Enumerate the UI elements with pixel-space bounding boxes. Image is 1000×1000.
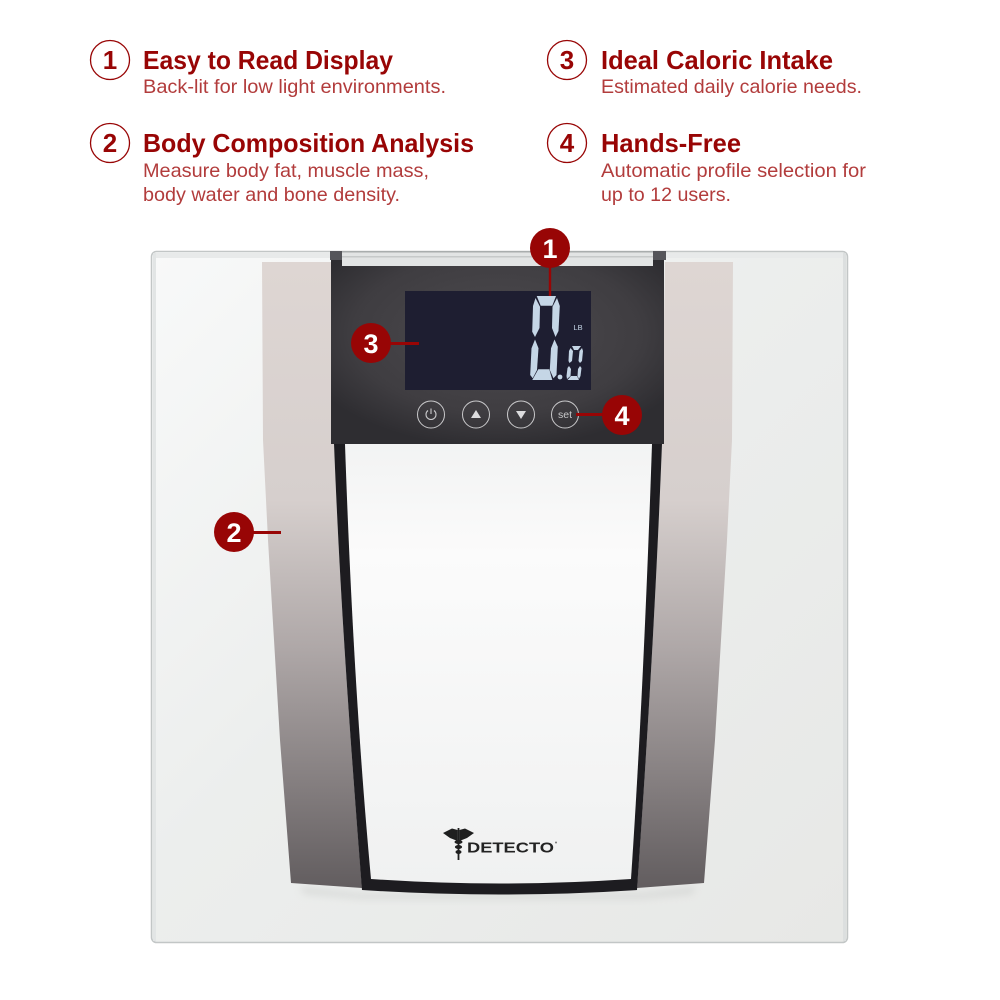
callout 2: 2 — [226, 518, 242, 548]
black frame and control panel — [331, 260, 664, 894]
lcd display — [405, 291, 591, 390]
callout 1: 1 — [542, 234, 558, 264]
item 2: body composition analysis — [90, 124, 474, 206]
button: set — [552, 401, 578, 428]
item 1: easy to read display — [90, 40, 446, 98]
button: up — [462, 401, 490, 428]
item 4: hands-free: Automatic profile selection for — [601, 160, 867, 182]
large digit 0 — [530, 296, 560, 380]
caduceus icon — [443, 828, 474, 860]
small digit 0 — [566, 346, 583, 380]
callout 4: 4 — [614, 401, 630, 431]
callout 2 — [214, 512, 281, 552]
item 4: hands-free — [548, 124, 867, 206]
item 1: easy to read display: Easy to Read Display — [143, 45, 394, 75]
control panel face — [331, 260, 664, 444]
item 3: ideal caloric intake: Ideal Caloric Intake — [601, 45, 833, 75]
top glass strip — [330, 251, 666, 266]
unit label: LB — [573, 323, 583, 332]
item 2: body composition analysis: body water and bone density. — [143, 184, 400, 206]
callout 3: 3 — [363, 329, 379, 359]
detecto logo: DETECTO — [467, 840, 554, 856]
button: set: set — [558, 409, 572, 421]
item 4: hands-free: 4 — [560, 128, 575, 158]
metal bar: left — [262, 262, 362, 888]
button: power — [418, 401, 444, 428]
metal bar: right — [637, 262, 733, 888]
glass platform — [152, 252, 848, 942]
white platform panel — [345, 444, 652, 884]
scale illustration — [152, 251, 848, 942]
decimal point — [558, 375, 562, 379]
item 2: body composition analysis: 2 — [103, 128, 117, 158]
callout 1 — [530, 228, 570, 296]
item 4: hands-free: Hands-Free — [601, 128, 741, 158]
item 3: ideal caloric intake: Estimated daily calorie needs. — [601, 76, 862, 98]
item 4: hands-free: up to 12 users. — [601, 184, 731, 206]
callout 4 — [576, 395, 642, 435]
item 3: ideal caloric intake — [548, 40, 862, 98]
item 1: easy to read display: Back-lit for low light environments. — [143, 76, 446, 98]
button: down — [508, 401, 534, 428]
item 2: body composition analysis: Body Composition Analysis — [143, 128, 474, 158]
detecto logo — [443, 828, 557, 860]
callout 3 — [351, 323, 419, 363]
item 2: body composition analysis: Measure body fat, muscle mass, — [143, 160, 429, 182]
item 3: ideal caloric intake: 3 — [560, 45, 574, 75]
item 1: easy to read display: 1 — [103, 45, 117, 75]
